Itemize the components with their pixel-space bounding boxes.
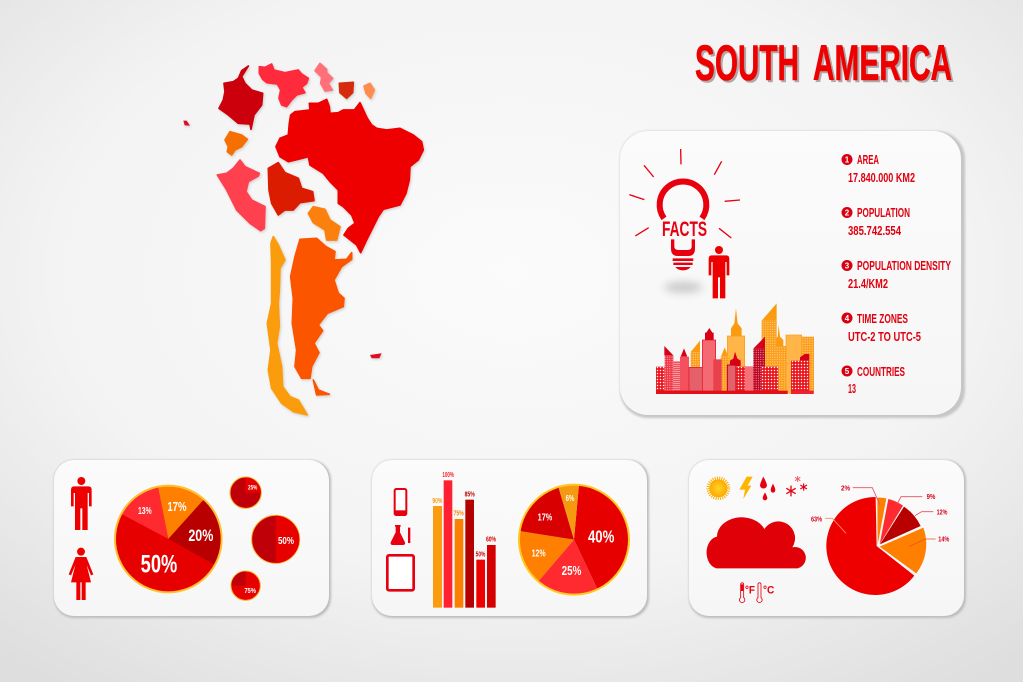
icon: flask bbox=[391, 525, 410, 545]
bar chart: 90% bbox=[432, 496, 442, 505]
country: Peru bbox=[217, 160, 265, 231]
bar chart: 75% bbox=[454, 509, 464, 518]
icon: woman bbox=[69, 548, 93, 600]
country: Paraguay bbox=[308, 207, 340, 240]
fact list: 17.840.000 KM2 bbox=[848, 171, 915, 185]
bar chart: 100% bbox=[442, 470, 454, 479]
country: Colombia bbox=[219, 66, 263, 129]
icon: cloud bbox=[707, 517, 806, 568]
bar chart: 50% bbox=[476, 549, 485, 558]
country: French Guiana bbox=[364, 83, 374, 98]
country: Ecuador bbox=[225, 132, 247, 155]
icon: tablet bbox=[387, 555, 414, 590]
person icon bbox=[709, 246, 729, 298]
climate content bbox=[707, 476, 949, 603]
panel: population bbox=[54, 460, 331, 618]
pie chart: technology: 6% bbox=[566, 494, 574, 503]
icon: snowflakes bbox=[786, 476, 807, 496]
islands bbox=[183, 121, 382, 358]
icon: thermometers: °F bbox=[745, 584, 755, 596]
pie chart: population: 20% bbox=[188, 526, 213, 545]
pie chart: technology: 25% bbox=[562, 563, 581, 578]
country: Venezuela bbox=[259, 64, 308, 107]
pie chart: population: 50% bbox=[141, 550, 177, 578]
fact list: COUNTRIES bbox=[857, 365, 905, 379]
fact list: 21.4/KM2 bbox=[848, 277, 888, 291]
mini pie: 75% bbox=[231, 571, 260, 600]
technology charts bbox=[387, 470, 629, 608]
pie chart: technology: 12% bbox=[532, 548, 546, 559]
pie chart: climate bbox=[811, 483, 949, 595]
panel: technology bbox=[372, 460, 649, 618]
mini pie: 50% bbox=[252, 515, 300, 563]
fact markers: 4 bbox=[845, 314, 850, 323]
fact list: UTC-2 TO UTC-5 bbox=[848, 330, 921, 344]
icon: sun bbox=[708, 478, 728, 498]
title: SOUTH bbox=[695, 35, 799, 91]
panel: climate bbox=[689, 460, 966, 618]
country: Argentina bbox=[291, 238, 352, 395]
pie chart: technology: 17% bbox=[538, 513, 552, 524]
fact list: POPULATION DENSITY bbox=[857, 259, 951, 273]
fact list bbox=[848, 153, 951, 396]
pie chart: climate: 63% bbox=[811, 515, 822, 524]
icon: man bbox=[71, 477, 92, 530]
icon: phone bbox=[395, 489, 406, 515]
country: Bolivia bbox=[268, 163, 314, 215]
title bbox=[695, 35, 954, 93]
icon: rain drops bbox=[760, 477, 775, 500]
pie chart: technology: 40% bbox=[588, 527, 614, 547]
mini pie: 75%: 75% bbox=[244, 586, 256, 595]
mini pie: 50%: 50% bbox=[278, 536, 294, 547]
FACTS label: FACTS bbox=[662, 218, 707, 241]
pie chart: population: 17% bbox=[167, 499, 187, 514]
country: Suriname bbox=[339, 82, 353, 98]
fact markers bbox=[842, 154, 852, 376]
fact list: AREA bbox=[857, 153, 879, 167]
pie chart: climate: 12% bbox=[937, 507, 947, 516]
pie chart: climate: 14% bbox=[938, 535, 949, 544]
pie chart: population bbox=[115, 486, 222, 592]
mini pie: 25% bbox=[230, 477, 261, 508]
icon: thermometers bbox=[739, 583, 775, 603]
bar chart: 85% bbox=[465, 489, 475, 498]
fact list: POPULATION bbox=[857, 206, 910, 220]
fact list: 385.742.554 bbox=[848, 224, 901, 238]
country: Brazil bbox=[276, 99, 423, 253]
facts lightbulb icon bbox=[629, 149, 740, 293]
country: Chile bbox=[267, 237, 307, 415]
icon: lightning bbox=[739, 477, 753, 499]
country: Guyana bbox=[315, 63, 333, 91]
city skyline bbox=[656, 303, 814, 394]
fact list: 13 bbox=[848, 382, 856, 396]
map: South America bbox=[183, 63, 423, 415]
fact list: TIME ZONES bbox=[857, 312, 908, 326]
pie chart: climate: 2% bbox=[841, 483, 850, 492]
population charts bbox=[69, 477, 300, 600]
pie chart: climate: 9% bbox=[927, 492, 935, 501]
pie chart: population: 13% bbox=[138, 506, 152, 517]
pie chart: technology bbox=[519, 484, 629, 595]
fact markers: 2 bbox=[845, 208, 850, 218]
fact markers: 5 bbox=[845, 367, 850, 376]
mini pie: 25%: 25% bbox=[248, 485, 257, 492]
fact markers: 1 bbox=[845, 156, 850, 164]
bar chart: 60% bbox=[486, 535, 496, 544]
fact markers: 3 bbox=[845, 262, 850, 270]
bar chart bbox=[432, 470, 496, 608]
title: SOUTH bbox=[697, 37, 801, 93]
panel: facts bbox=[620, 131, 965, 418]
icon: thermometers: °C bbox=[763, 584, 775, 596]
